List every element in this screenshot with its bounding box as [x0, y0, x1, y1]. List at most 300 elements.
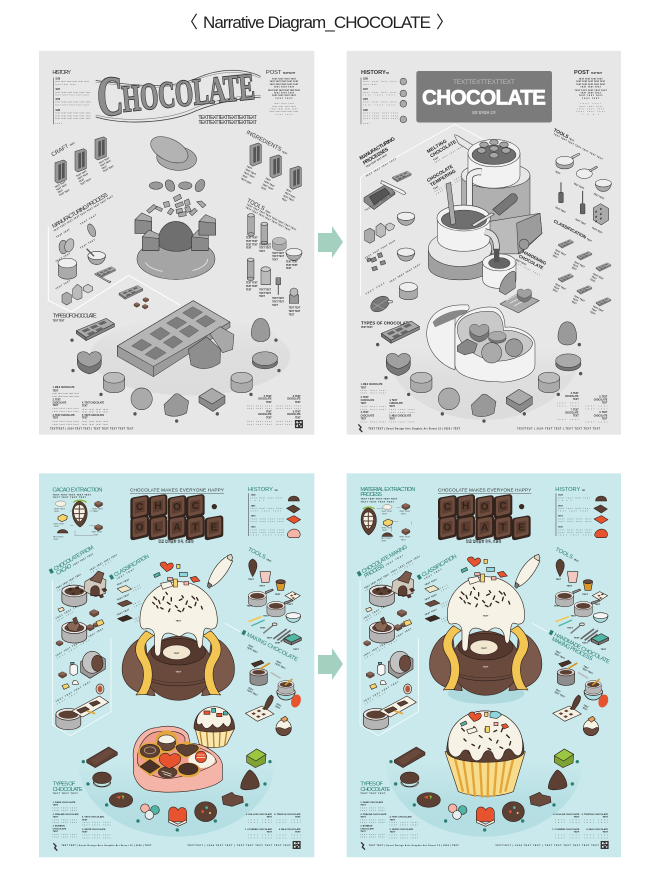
tools illustration — [532, 559, 609, 645]
heading: craft: CRAFT TEXT — [51, 140, 77, 158]
process outline and items: TEXT TEXT — [80, 214, 98, 226]
heading: tools: TOOLS TEXT — [246, 198, 272, 216]
text block: post: text text text text — [579, 77, 603, 81]
title box: CHOCOLATE — [422, 87, 546, 110]
diagram: cacao pod: TEXT — [54, 511, 60, 513]
text block: types left: TEXT — [360, 805, 367, 807]
chart: ingredient bars: TEXT TEXT — [243, 172, 255, 180]
text block: post: text text text — [581, 91, 601, 94]
heading: chocolate from cacao — [49, 545, 98, 579]
heading: types of chocolate — [53, 314, 97, 323]
text block: intro — [361, 499, 398, 503]
text block: history: text text text text — [558, 517, 592, 520]
making labels: TEXT — [582, 707, 588, 712]
heading: melting chocolate: TEXT — [433, 157, 440, 162]
text block: classification items — [117, 579, 143, 623]
text block: types left: text text text — [390, 834, 418, 837]
text block: classification items: text — [441, 602, 450, 608]
text block: history with circles: text text text text — [363, 91, 397, 94]
text block: types right: TEXT — [295, 817, 301, 819]
heading: types of chocolate: TYPES OF — [360, 782, 384, 788]
text block: post — [575, 77, 607, 116]
heading: handmade chocolate making process: HANDMADE CHOCOLATE — [553, 632, 611, 666]
text block: types left: text text text — [360, 821, 385, 824]
subtitle: 달콤 입머물한 유혹, 초콜릿 — [466, 538, 501, 543]
tools labels: TEXT — [263, 616, 270, 618]
tools labels: TEXT — [275, 594, 281, 596]
diagram: cacao pod: TEXT TEXT — [399, 511, 411, 513]
text block: column labels: TEXT TEXT TEXT TEXT — [364, 574, 390, 590]
tools grid: TEXT TEXT — [286, 265, 298, 267]
tools labels: TEXT — [595, 604, 601, 606]
text block: types left: text text text text text — [53, 392, 79, 395]
text block: history timeline — [53, 77, 91, 125]
text block: post: text text text — [577, 107, 604, 111]
heading: classification: CLASSIFICATION — [113, 554, 150, 579]
making labels: TEXT — [276, 661, 282, 665]
text block: types right: CHOCOLATE — [594, 399, 608, 402]
text block: types left: TEXT — [390, 832, 396, 834]
heading: material extraction process: PROCESS — [360, 492, 382, 498]
tools grid: TEXT — [272, 260, 278, 262]
diagram: cacao pod: TEXT TEXT — [53, 536, 64, 538]
history icons — [287, 496, 301, 538]
diagram: cacao pod: TEXT TEXT — [381, 538, 392, 540]
text block: column labels: text text — [56, 691, 78, 705]
text block: types left: 1. DARK CHOCOLATE — [53, 801, 76, 804]
title box: 달콤 입머물한 유혹 — [472, 109, 496, 114]
panel: grey melting process poster — [347, 51, 621, 435]
tools labels: TEXT — [287, 604, 294, 606]
title box: TEXTTEXTTEXTTEXT — [453, 79, 515, 86]
text block: history with circles: 1930 — [363, 110, 369, 112]
sphere labels — [481, 616, 489, 668]
diagram: cacao pod: TEXT — [381, 541, 387, 543]
text block: types left: TEXT — [82, 819, 88, 821]
text block: post: text text text text text text — [268, 89, 300, 92]
tools labels: TEXT — [567, 627, 574, 629]
process items: TEXT TEXT TEXT TEXT — [390, 264, 421, 284]
tools items: TEXT TEXT — [591, 227, 603, 235]
text block: column labels: TEXT TEXT TEXT TEXT — [391, 555, 421, 574]
text block: post: text text text — [576, 110, 605, 113]
tools items: TEXT TEXT — [575, 219, 586, 226]
text block: types right: text text text — [247, 404, 272, 407]
text block: classification items — [425, 579, 451, 623]
qr code — [295, 420, 303, 428]
heading: chocolate from cacao: CACAO — [55, 563, 73, 577]
text block: types left: TEXT — [82, 418, 88, 420]
heading: types of chocolate: TEXT TEXT TEXT — [360, 793, 386, 795]
text block: types right: TEXT — [573, 399, 579, 401]
text block: types left: TEXT — [361, 418, 367, 420]
text block: types right: TEXT — [295, 402, 301, 404]
text block: history timeline: 1930 — [55, 110, 61, 112]
tools labels: TEXT — [571, 616, 577, 618]
text block: history with circles: text text text text — [363, 80, 397, 83]
heading: chocolate making process: CHOCOLATE MAKING — [361, 544, 409, 575]
text block: types left: 1. MILK CHOCOLATE — [361, 383, 383, 386]
chart: ingredient bars — [240, 143, 301, 206]
text block: history: 1528 — [558, 495, 564, 497]
text block: types right: text text — [557, 404, 579, 407]
text block: history timeline: 1876 — [55, 99, 61, 101]
text block: types right: TEXT — [573, 416, 579, 418]
ring of chocolate types — [376, 321, 582, 423]
text block: types left: text text text — [361, 389, 386, 392]
text block: types left: text text text — [389, 411, 415, 414]
tools labels: TEXT — [582, 642, 589, 644]
text block: types right: TEXT — [602, 817, 609, 819]
tools labels: TEXT — [554, 606, 560, 608]
text block: history: text text text text — [558, 531, 592, 534]
diagram: cacao pod: TEXT TEXT — [91, 532, 103, 534]
text block: types right: CHOCOLATE — [287, 398, 301, 401]
heading: chocolate makes everyone happy: CHOCOLATE MAKES EVERYONE HAPPY — [438, 488, 531, 493]
text block: types left — [360, 801, 418, 839]
left column illustration — [52, 571, 132, 736]
text block: history timeline: text text text text text — [55, 94, 89, 97]
text block: types right: text text text — [247, 420, 272, 423]
chart: ingredient bars: TEXT TEXT — [245, 169, 257, 177]
heading: melting chocolate — [426, 133, 463, 165]
heading: types of chocolate: TYPES OF CHOCOLATE — [53, 314, 97, 320]
text block: types left: CHOCOLATE — [361, 399, 375, 402]
text block: types left: text text text — [53, 833, 77, 836]
text block: types right: 6. HOLLOW CHOCOLATE — [246, 813, 273, 816]
tools grid: TEXT TEXT — [289, 311, 301, 313]
text block: classification items: TEXT TEXT — [425, 609, 438, 617]
diagram: cacao pod: TEXT — [93, 534, 99, 536]
text block: types right: TEXT — [295, 418, 301, 420]
diagram: cacao pod: TEXT — [93, 511, 99, 513]
text block: types right: 9. MILK CHOCOLATE — [586, 828, 609, 831]
text block: manufacturing intro: TEXT TEXT TEXT TEXT TEXT TEXT TEXT TEXT TEXT — [54, 195, 114, 233]
text block: column labels: text text text — [56, 639, 90, 660]
text block: column labels: TEXT TEXT TEXT — [363, 604, 390, 620]
text block: intro: TEXT TEXT TEXT TEXT — [361, 501, 395, 503]
tools labels: TEXT — [556, 579, 562, 581]
text block: history: 1528 — [251, 495, 256, 497]
text block: types right: TEXT — [266, 832, 273, 834]
text block: types right: text text text — [276, 423, 301, 426]
panel: teal cupcake poster — [347, 473, 621, 857]
text block: types left: TEXT — [53, 817, 59, 819]
text block: history timeline: text — [55, 122, 62, 125]
heading: manufacturing process: PROCESSES — [362, 146, 390, 166]
text block: types left: 2. PRALINE CHOCOLATE — [360, 813, 387, 816]
text block: types left: text text text — [390, 824, 418, 827]
heading: hardening chocolate: CHOCOLATE — [518, 253, 544, 271]
process items — [364, 158, 421, 315]
tools grid: TEXT TEXT — [259, 244, 272, 246]
text block: subtitle: TEXTTEXTTEXTTEXTTEXTTEXT — [198, 115, 257, 121]
text block: types left: 5. TEXT CHOCOLATE — [82, 414, 105, 417]
text block: types left: TEXT — [53, 831, 59, 833]
text block: history timeline: text text text — [55, 83, 76, 86]
history icons — [594, 496, 608, 538]
heading: making chocolate: MAKING CHOCOLATE — [245, 632, 299, 663]
text block: post: text text text text — [271, 107, 298, 111]
heading: melting chocolate: CHOCOLATE — [429, 139, 458, 159]
chart: craft bars: TEXT TEXT — [59, 189, 71, 197]
heading: chocolate tempering: TEXT — [433, 186, 440, 191]
classification bars: TEXT — [572, 264, 579, 269]
heading: chocolate makes everyone happy: CHOCOLATE MAKES EVERYONE HAPPY — [130, 488, 224, 493]
arrow: bottom — [318, 648, 343, 680]
heading: chocolate making process: PROCESS — [363, 563, 386, 580]
classification bars: TEXT — [552, 255, 558, 260]
footer logo — [361, 842, 365, 850]
text block: types right: text text — [248, 821, 272, 824]
tools labels: TEXT — [293, 649, 300, 651]
chart: craft bars: TEXT TEXT — [103, 165, 115, 173]
classification bars: TEXT — [591, 309, 597, 313]
classification bars: TEXT — [571, 267, 577, 272]
heading: tools: TOOLS TEXT — [554, 547, 581, 564]
text block: history with circles: text text — [363, 83, 377, 86]
text block: types right: CHOCOLATE — [594, 414, 608, 417]
making scene — [553, 660, 610, 736]
heading: classification: CLASSIFICATION TEXT — [553, 219, 594, 243]
classification bars: TEXT — [591, 276, 597, 281]
text block: types right: text text — [555, 818, 580, 821]
heading: types of chocolate: TEXT TEXT TEXT — [53, 793, 78, 795]
ring markers — [389, 760, 579, 832]
ring of chocolate types — [70, 318, 281, 423]
heading: chocolate tempering: text text text — [435, 177, 463, 195]
tools grid: TEXT TEXT — [259, 248, 272, 250]
tools grid — [246, 214, 302, 316]
text block: history timeline: 1847 — [55, 88, 61, 91]
chart: ingredient bars: TEXT — [260, 187, 267, 192]
text block: types right — [247, 396, 301, 426]
heading: history: HISTORY TM — [248, 487, 278, 493]
bottom disc — [386, 762, 583, 837]
chart: ingredient bars: TEXT TEXT — [262, 184, 274, 191]
heading: classification: TEXT TEXT — [424, 569, 443, 581]
tools labels: TEXT — [567, 586, 573, 588]
text block: post: text text — [582, 97, 599, 100]
making labels: TEXT TEXT — [246, 690, 258, 697]
process outline and items: TEXT TEXT — [56, 253, 71, 263]
subtitle: 달콤 입머물한 유혹, 초콜릿 — [158, 538, 194, 543]
text block: cacao intro — [53, 494, 92, 499]
text block: post: text text text — [579, 94, 603, 97]
heading: history: HISTORY — [52, 70, 71, 76]
text block: classification items: TEXT TEXT — [425, 579, 438, 587]
text block: history timeline: text text text text text text — [55, 91, 91, 94]
main sphere illustration — [430, 577, 542, 695]
chocolate letter tiles: E — [211, 522, 218, 533]
text block: classification items: text — [440, 600, 449, 606]
making labels: TEXT TEXT — [554, 653, 566, 661]
text block: types right: text text — [584, 818, 608, 821]
tools grid: TEXT — [246, 248, 252, 250]
text block: history with circles: text text text text — [363, 112, 398, 115]
diagram: cacao pod: TEXT TEXT — [399, 537, 411, 539]
text block: types right: TEXT — [295, 832, 301, 834]
heading: tools: TOOLS TEXT — [552, 127, 576, 144]
tools grid: TEXT TEXT — [246, 237, 258, 240]
tools items: TEXT TEXT — [555, 207, 566, 214]
text block: history: text — [558, 499, 572, 502]
heading: types of chocolate: CHOCOLATE — [360, 787, 391, 793]
heading: chocolate from cacao: CHOCOLATE FROM — [53, 545, 95, 573]
chart: craft bars: TEXT TEXT — [56, 184, 68, 192]
text block: types right: text text — [555, 821, 580, 824]
text block: subtitle — [198, 115, 257, 126]
text block: types left: CHOCOLATE — [53, 827, 67, 830]
chart: craft bars: TEXT TEXT — [80, 178, 92, 186]
making labels: TEXT TEXT — [554, 691, 566, 699]
process items: TEXT TEXT TEXT TEXT — [366, 158, 397, 178]
text block: types left: text text text — [53, 818, 77, 821]
text block: history: text text text — [558, 534, 592, 537]
confetti topping — [461, 557, 507, 584]
text block: types right: 6. TEXT — [571, 393, 579, 395]
heading: material extraction process — [360, 487, 415, 498]
sphere labels: TEXT — [176, 621, 182, 623]
process outline and items: TEXT TEXT — [56, 229, 71, 239]
text block: tools intro: TEXT TEXT TEXT TEXT TEXT TEXT TEXT TEXT — [246, 204, 297, 232]
text block: types right: 7. COVERED CHOCOLATE — [245, 828, 273, 831]
text block: classification items: text — [442, 617, 451, 623]
text block: types right: TEXT — [602, 403, 608, 405]
text block: types left: text text text — [389, 408, 415, 411]
title: 〈 — [181, 13, 198, 32]
making labels — [554, 651, 595, 712]
text block: types right: text text — [248, 834, 272, 837]
text block: types left: text text text — [360, 806, 385, 809]
text block: types right: text text text — [247, 407, 272, 410]
classification bars: TEXT — [553, 286, 560, 291]
text block: types right: 8. TRUFFLE CHOCOLATE — [274, 813, 301, 816]
text block: history with circles — [361, 77, 407, 125]
text block: post: text text text — [581, 86, 601, 89]
text block: column labels: TEXT TEXT TEXT TEXT TEXT TEXT — [363, 628, 413, 658]
text block: types left: text text text — [390, 836, 418, 839]
text block: types left: 4. TEXT CHOCOLATE — [82, 402, 105, 405]
text block: intro: TEXT TEXT TEXT TEXT TEXT — [361, 499, 398, 501]
text block: classification items: text — [441, 586, 450, 592]
text block: column labels: text text — [392, 562, 414, 576]
footer logo — [53, 843, 57, 851]
text block: types right: TEXT — [266, 817, 273, 819]
text block: types right — [557, 393, 608, 423]
text block: types right: TEXT — [266, 402, 272, 404]
text block: post: text text text text text — [270, 80, 298, 83]
text block: column labels: text text — [57, 580, 75, 592]
classification bars: TEXT — [552, 289, 558, 294]
classification bars: TEXT TEXT — [592, 306, 604, 313]
text block: types right: text text — [277, 836, 301, 839]
text block: history — [249, 493, 284, 537]
text block: types left — [361, 383, 415, 423]
text block: types right: text text text — [247, 423, 272, 426]
text block: column labels: TEXT TEXT TEXT TEXT — [363, 681, 400, 703]
chocolate letter tiles: O — [481, 502, 489, 513]
classification bars: TEXT — [589, 311, 596, 316]
tools grid: TEXT TEXT — [272, 256, 285, 258]
text block: history with circles: 1847 — [363, 88, 369, 91]
text block: history: text text text text — [251, 496, 283, 499]
chocolate letter tiles: O — [443, 522, 451, 533]
text block: types right: 8. TRUFFLE CHOCOLATE — [582, 813, 609, 816]
text block: types left: TEXT — [361, 403, 367, 405]
chocolate letter tiles: H — [462, 501, 469, 512]
chart: ingredient bars: TEXT — [265, 178, 271, 183]
text block: types right: CHOCOLATE — [258, 413, 272, 416]
heading: ingredients: INGREDIENTS TEXT — [245, 130, 289, 157]
text block: post: text text text text — [272, 94, 296, 97]
heart gift box — [427, 305, 535, 382]
classification bars: TEXT — [572, 298, 579, 303]
process items: TEXT TEXT TEXT TEXT — [365, 192, 397, 212]
chocolate letter tiles: T — [500, 522, 506, 533]
text block: post: text text text — [274, 86, 294, 89]
heading: material extraction process: MATERIAL EXTRACTION — [360, 487, 415, 493]
text block: types right: CHOCOLATE — [565, 412, 579, 415]
text block: history: text text text text — [558, 496, 590, 499]
tools grid: TEXT TEXT — [246, 283, 258, 285]
tools labels: TEXT — [267, 637, 273, 639]
arrow: top — [318, 226, 343, 258]
heading: hardening chocolate: TEXT TEXT — [515, 259, 527, 267]
text block: types left: TEXT — [360, 817, 367, 819]
text block: history timeline: text text text text text text — [55, 114, 91, 117]
big chocolate bar — [117, 301, 234, 377]
text block: post: text text — [276, 97, 293, 100]
text block: column labels: text text — [56, 611, 74, 622]
diagram: cacao pod — [53, 500, 104, 541]
chocolate box and cupcake — [133, 707, 235, 792]
text block: types right: text text — [586, 407, 608, 410]
text block: types left: 5. WHITE CHOCOLATE — [82, 828, 106, 831]
classification bars: TEXT TEXT — [592, 273, 604, 281]
text block: types left: text text text text — [53, 420, 79, 423]
text block: history with circles: text text text — [363, 103, 395, 106]
text block: classification items: TEXT TEXT — [117, 609, 130, 617]
footer logo — [358, 424, 362, 432]
text block: types left: text text text text text — [53, 395, 79, 398]
text block: types right: 8. TEXT — [599, 396, 608, 399]
text block: types left: TEXT — [82, 405, 88, 407]
text block: types right: text text — [557, 418, 579, 421]
text block: types left: text text text — [53, 821, 77, 824]
piping bag — [207, 554, 233, 588]
chart: craft bars: TEXT TEXT — [55, 181, 67, 189]
text block: history timeline: text text text text text text — [55, 80, 89, 83]
footer text: TEXTTEXT | 2024 TEXT TEXT | TEXT TEXT TEXT TEXT TEXT — [50, 428, 134, 431]
left column illustration — [360, 571, 440, 736]
text block: types left: text text text text — [82, 408, 108, 411]
text block: column labels: text text — [90, 560, 112, 574]
heading: types of chocolate — [361, 320, 411, 329]
text block: history with circles: 1876 — [363, 99, 369, 101]
text block: types left: CHOCOLATE — [360, 827, 374, 830]
text block: types left: TEXT — [53, 805, 59, 807]
text block: types left: TEXT — [389, 418, 396, 420]
text block: types left: 2. TEXT — [53, 400, 61, 402]
text block: classification items: text — [134, 602, 143, 608]
text block: types left: 3. BONBON — [360, 826, 373, 828]
text block: post: text text text — [274, 102, 294, 105]
text block: types right: CHOCOLATE — [565, 395, 579, 398]
tools grid: TEXT TEXT — [259, 293, 272, 295]
text block: types right: text text — [277, 818, 301, 821]
making labels: TEXT — [276, 703, 282, 708]
